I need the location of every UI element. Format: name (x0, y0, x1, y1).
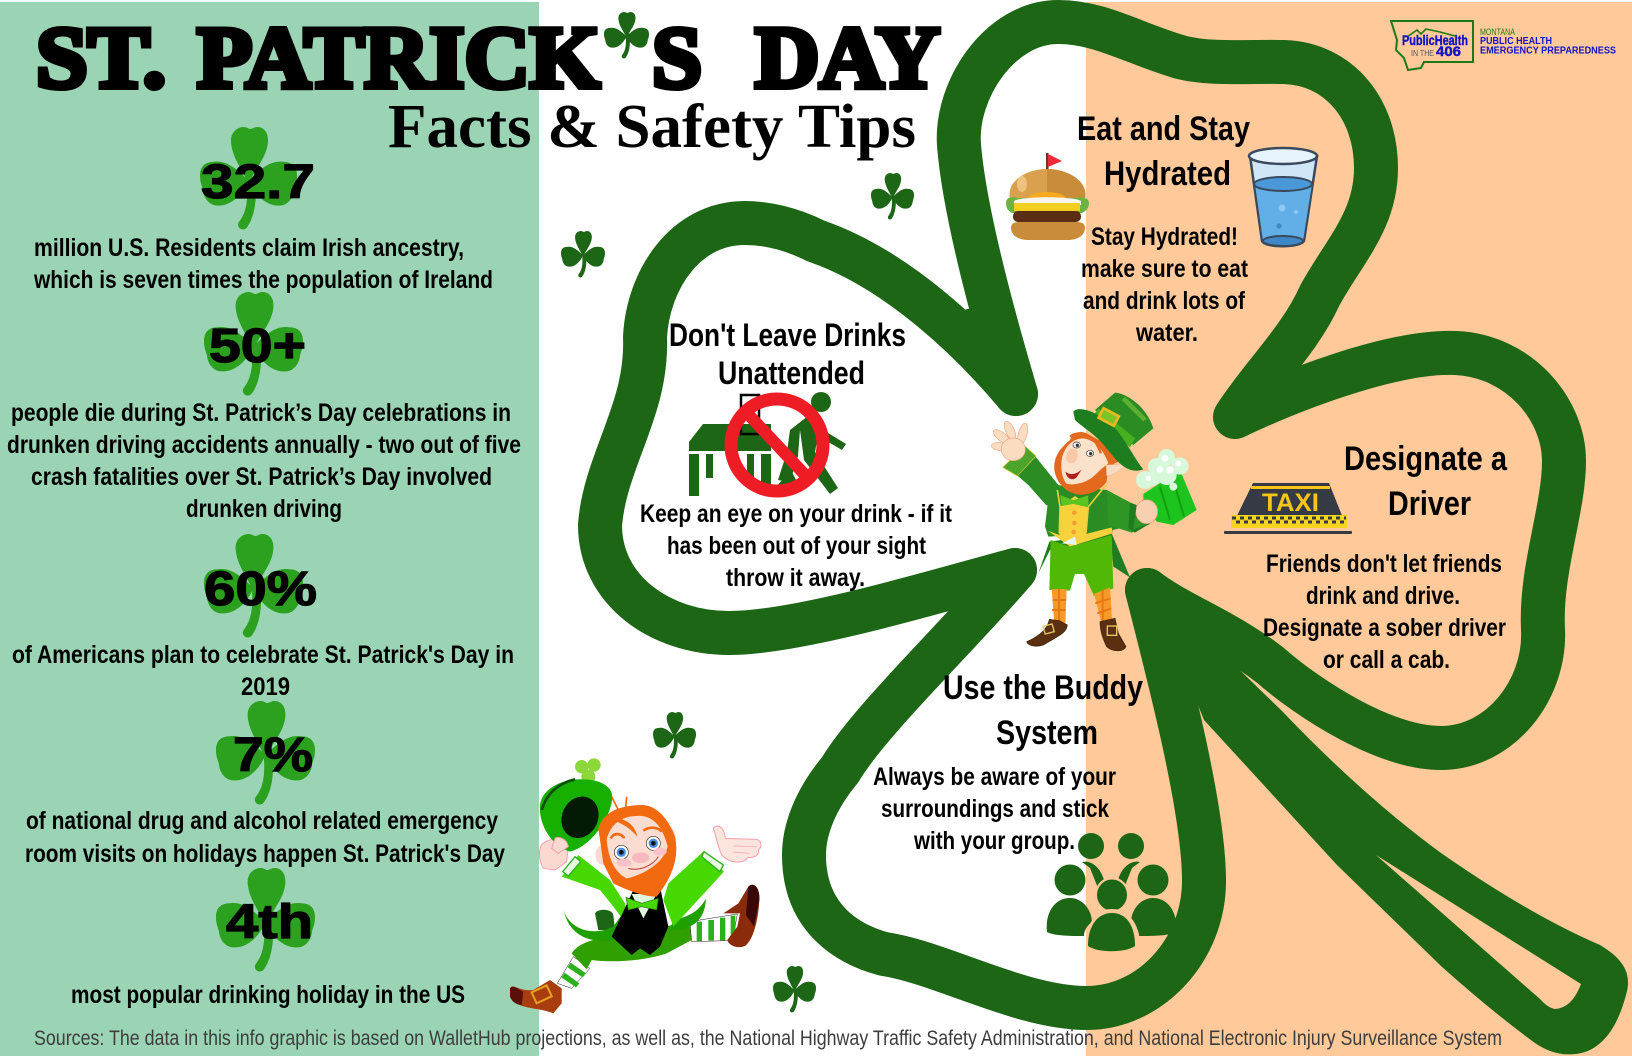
decorative shamrock b (561, 231, 605, 277)
panel: stat 4th (71, 868, 465, 1009)
logo: Public Health in the 406: EMERGENCY PREPAREDNESS (1480, 46, 1616, 56)
title: PATRICK (197, 10, 600, 107)
panel: eat and stay hydrated: Stay Hydrated! (1091, 223, 1238, 251)
panel: don't leave drinks unattended: throw it away. (726, 564, 865, 592)
logo: Public Health in the 406: PUBLIC HEALTH (1480, 36, 1552, 47)
logo: Public Health in the 406: MONTANA (1480, 27, 1515, 37)
illustration: leprechaun with beer (991, 393, 1197, 651)
illustration: jumping leprechaun (510, 758, 761, 1013)
panel: stat 50+: drunken driving accidents annually - two out of five (7, 431, 521, 459)
icon: glass of water (1249, 148, 1317, 246)
subtitle: Facts & Safety Tips (388, 93, 916, 161)
panel: stat 50+: people die during St. Patrick’s Day celebrations in (11, 399, 511, 427)
decorative shamrock a (604, 12, 649, 58)
icon: taxi sign: TAXI (1262, 489, 1319, 517)
panel: use the buddy system (873, 669, 1176, 953)
panel: don't leave drinks unattended: Keep an eye on your drink - if it (640, 500, 953, 528)
logo: Public Health in the 406: IN THE (1411, 49, 1434, 58)
panel: don't leave drinks unattended (640, 317, 953, 592)
panel: designate a driver (1224, 440, 1508, 674)
panel: stat 4th: most popular drinking holiday in the US (71, 981, 465, 1009)
panel: stat 50+: drunken driving (186, 495, 342, 523)
panel: use the buddy system: Use the Buddy (943, 669, 1143, 707)
large shamrock outline (600, 22, 1628, 1054)
panel: designate a driver: drink and drive. (1306, 582, 1460, 610)
panel: stat 32.7: which is seven times the population of Ireland (33, 266, 493, 294)
panel: stat 60%: 2019 (241, 673, 290, 701)
panel: designate a driver: Driver (1388, 485, 1471, 523)
logo: Public Health in the 406: PublicHealth (1402, 33, 1468, 48)
panel: eat and stay hydrated: make sure to eat (1081, 255, 1249, 283)
panel: use the buddy system: Always be aware of your (873, 763, 1116, 791)
title: ST. (36, 10, 166, 107)
panel: designate a driver: Designate a (1344, 440, 1508, 478)
title: S (652, 10, 702, 107)
icon: no unattended drink (689, 392, 846, 496)
icon: group of people (1047, 833, 1176, 953)
decorative shamrock c (871, 173, 914, 219)
panel: eat and stay hydrated (1006, 110, 1317, 347)
title: ' (622, 24, 633, 69)
title (36, 10, 940, 107)
panel: stat 4th: 4th (226, 896, 313, 949)
panel: stat 60% (12, 534, 514, 701)
panel: stat 32.7 (33, 127, 493, 294)
icon: taxi sign (1224, 483, 1352, 534)
panel: stat 32.7: 32.7 (201, 156, 315, 209)
panel: don't leave drinks unattended: has been out of your sight (667, 532, 927, 560)
background: peach panel (1086, 2, 1632, 1056)
panel: stat 7% (25, 701, 505, 868)
panel: stat 7%: 7% (233, 729, 313, 782)
panel: eat and stay hydrated: and drink lots of (1083, 287, 1246, 315)
logo: Public Health in the 406 (1391, 21, 1616, 70)
decorative shamrock e (773, 966, 816, 1012)
icon: burger (1006, 153, 1089, 240)
panel: use the buddy system: surroundings and stick (881, 795, 1109, 823)
background: white panel (539, 0, 1086, 1056)
panel: designate a driver: or call a cab. (1323, 646, 1450, 674)
panel: stat 50+: 50+ (209, 320, 306, 373)
background: green panel (0, 2, 539, 1056)
panel: don't leave drinks unattended: Don't Leave Drinks (669, 317, 906, 353)
panel: designate a driver: Friends don't let friends (1266, 550, 1502, 578)
panel: stat 60%: of Americans plan to celebrate St. Patrick's Day in (12, 641, 514, 669)
panel: eat and stay hydrated: Eat and Stay (1077, 110, 1250, 148)
panel: use the buddy system: System (996, 714, 1098, 752)
panel: eat and stay hydrated: Hydrated (1104, 155, 1231, 193)
decorative shamrock d (653, 712, 696, 758)
panel: use the buddy system: with your group. (913, 827, 1075, 855)
panel: stat 60%: 60% (204, 563, 317, 616)
panel: stat 7%: of national drug and alcohol related emergency (26, 807, 498, 835)
panel: eat and stay hydrated: water. (1135, 319, 1198, 347)
title: DAY (755, 10, 940, 107)
panel: designate a driver: Designate a sober driver (1263, 614, 1506, 642)
panel: stat 50+: crash fatalities over St. Patrick’s Day involved (31, 463, 492, 491)
panel: don't leave drinks unattended: Unattended (718, 355, 865, 391)
panel: stat 7%: room visits on holidays happen St. Patrick's Day (25, 840, 505, 868)
panel: stat 32.7: million U.S. Residents claim Irish ancestry, (34, 234, 464, 262)
panel: stat 50+ (7, 292, 521, 523)
logo: Public Health in the 406: 406 (1436, 44, 1462, 59)
